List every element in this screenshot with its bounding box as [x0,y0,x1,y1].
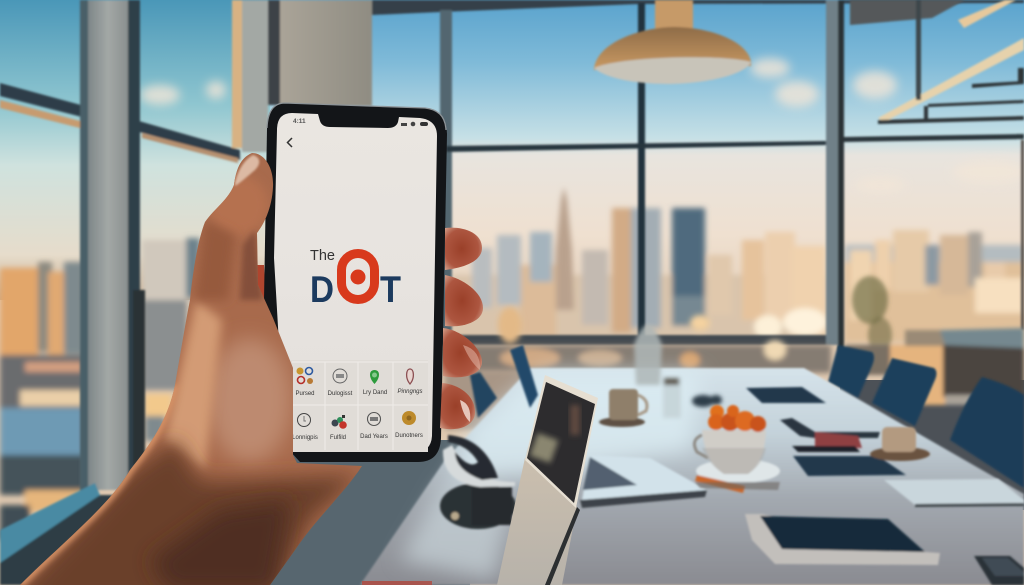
pendant lamp [594,0,751,84]
hand: finger behind phone [256,265,266,305]
app icon: Dulogisst: Dulogisst [328,391,353,397]
notebooks and stationery on table [746,387,1024,507]
hand: palm, wrist and thumb [20,153,362,585]
app icon grid [290,360,428,452]
phone body [264,103,447,462]
strip below windows [446,307,831,373]
app icon: Lonnigpis: Lonnigpis [292,435,318,441]
desk lamp base [440,435,516,529]
ring finger [443,328,482,377]
app icon: Pinngngs: Pinngngs [397,389,423,395]
status bar [293,118,428,126]
cup with oranges [694,405,780,493]
coffee cup, left [599,389,647,427]
table light reflection [400,372,700,580]
logo: The DOT: D [310,269,334,310]
office chairs [828,345,1024,488]
open laptop on table [580,455,707,508]
index finger [445,228,482,270]
background laptop and chair [470,345,538,418]
floor [270,370,1024,585]
water glass and bottle [634,325,722,418]
middle finger [445,275,483,326]
back arrow [288,138,292,147]
logo: The DOT: The [310,248,335,264]
app icon: Dunotners: Dunotners [395,433,423,439]
hand: fingers [440,228,483,429]
app icon: Lry Dand: Lry Dand [363,390,387,396]
left skyline [0,268,38,358]
smartphone on table [974,556,1024,585]
standing tablet in foreground [497,375,598,585]
app icon: Fulfild: Fulfild [330,435,346,441]
phone screen [274,113,437,452]
logo: The DOT [310,248,401,310]
smartphone [264,103,447,462]
ceiling beams top right [850,0,1024,124]
little finger [440,383,475,429]
app icon: Pursed: Pursed [295,391,315,397]
conference table [360,368,1024,585]
plant and side furniture [845,276,1024,405]
app icon: Dad Years: Dad Years [360,434,388,440]
status bar: 4:11 [293,118,306,125]
logo: The DOT: T [380,269,401,310]
city skyline [0,187,1024,540]
tablet on table [745,514,940,565]
